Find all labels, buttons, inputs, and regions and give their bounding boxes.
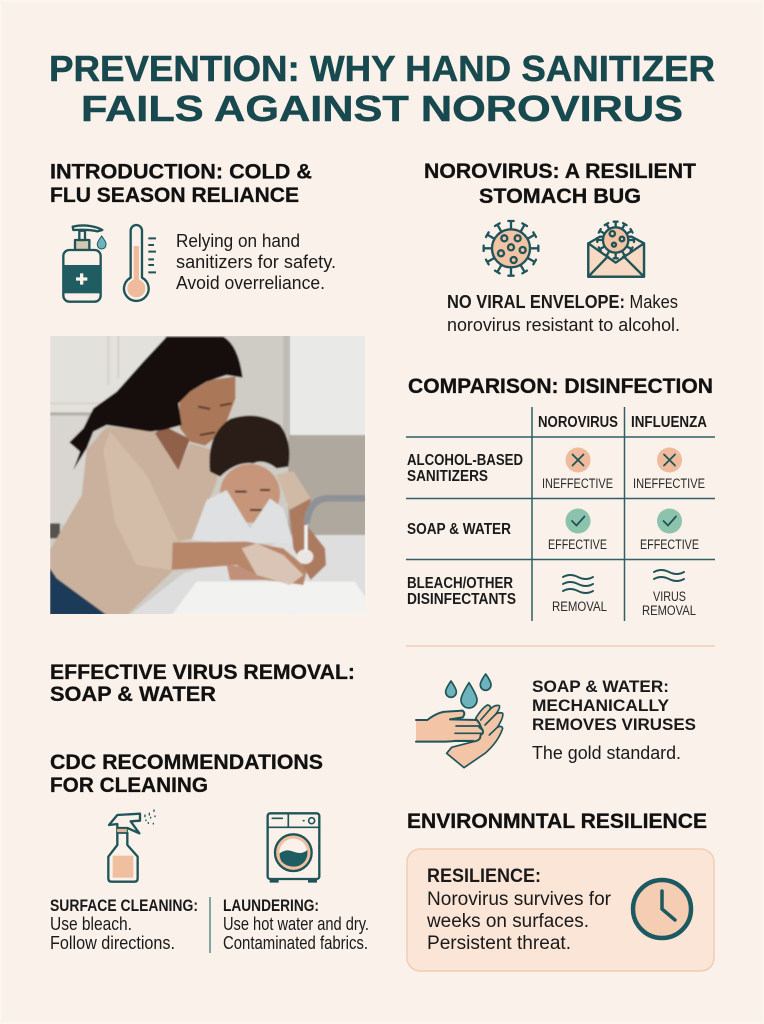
text: surface cleaning: SURFACE CLEANING: bbox=[50, 896, 198, 915]
text: surface cleaning: Follow directions. bbox=[50, 933, 175, 953]
panel: introduction bbox=[50, 160, 336, 302]
panel: norovirus bbox=[424, 159, 696, 335]
heading: environmental resilience: ENVIRONMNTAL RESILIENCE bbox=[407, 809, 707, 833]
icon: spray bottle bbox=[108, 810, 155, 882]
title: PREVENTION: WHY HAND SANITIZER bbox=[49, 48, 715, 89]
icon: virus in opened envelope bbox=[588, 222, 644, 277]
text: relying on sanitizers: Avoid overreliance. bbox=[176, 273, 325, 293]
row labels: SOAP & WATER bbox=[407, 521, 511, 538]
text: surface cleaning bbox=[50, 896, 198, 953]
text: laundering: Use hot water and dry. bbox=[223, 914, 369, 934]
icon: washing hands with water drops bbox=[416, 674, 503, 768]
text: mechanically removes viruses: MECHANICALLY bbox=[532, 696, 670, 715]
icon: virus bbox=[484, 221, 538, 276]
heading: norovirus bbox=[424, 159, 696, 208]
heading: CDC recommendations: FOR CLEANING bbox=[50, 773, 208, 797]
cell: soap norovirus effective: EFFECTIVE bbox=[548, 537, 607, 552]
icon: thermometer bbox=[124, 225, 156, 301]
heading: introduction: INTRODUCTION: COLD & bbox=[50, 160, 312, 184]
text: laundering: LAUNDERING: bbox=[223, 896, 319, 915]
text: resilience: weeks on surfaces. bbox=[426, 911, 589, 932]
cell: soap influenza effective: EFFECTIVE bbox=[640, 537, 699, 552]
cell: alcohol influenza ineffective: INEFFECTIVE bbox=[633, 476, 705, 491]
panel: soap and water bbox=[416, 674, 696, 768]
text: resilience bbox=[426, 866, 612, 954]
cell: soap norovirus effective bbox=[548, 508, 607, 552]
text: no viral envelope bbox=[447, 292, 680, 335]
cell: soap influenza effective bbox=[640, 508, 699, 552]
text: relying on sanitizers bbox=[176, 231, 336, 293]
row labels: SANITIZERS bbox=[407, 468, 488, 485]
title bbox=[49, 48, 715, 129]
icon: washing machine bbox=[268, 813, 319, 882]
photo: mother and child washing hands bbox=[50, 336, 365, 614]
text: relying on sanitizers: Relying on hand bbox=[176, 231, 300, 251]
cell: bleach norovirus removal bbox=[552, 575, 607, 614]
panel: comparison table bbox=[406, 374, 715, 621]
column headers bbox=[538, 414, 707, 431]
cell: bleach norovirus removal: REMOVAL bbox=[552, 599, 607, 614]
cell: bleach influenza virus removal: REMOVAL bbox=[642, 603, 696, 618]
text: mechanically removes viruses: The gold standard. bbox=[532, 743, 681, 763]
cell: bleach influenza virus removal: VIRUS bbox=[653, 589, 686, 604]
heading: norovirus: STOMACH BUG bbox=[479, 184, 641, 208]
text: no viral envelope: norovirus resistant to alcohol. bbox=[447, 315, 680, 335]
text: mechanically removes viruses: SOAP & WATER: bbox=[532, 677, 669, 696]
callout: resilience bbox=[407, 849, 714, 971]
column headers: NOROVIRUS bbox=[538, 414, 618, 431]
heading: effective virus removal bbox=[50, 660, 355, 706]
row labels: BLEACH/OTHER bbox=[407, 575, 513, 592]
title: FAILS AGAINST NOROVIRUS bbox=[81, 88, 683, 129]
text: resilience: RESILIENCE: bbox=[427, 866, 541, 887]
heading: norovirus: NOROVIRUS: A RESILIENT bbox=[424, 159, 696, 183]
row labels bbox=[407, 452, 523, 608]
row labels: ALCOHOL-BASED bbox=[407, 452, 523, 469]
heading: CDC recommendations: CDC RECOMMENDATIONS bbox=[50, 750, 323, 774]
heading: introduction: FLU SEASON RELIANCE bbox=[50, 183, 299, 207]
cell: alcohol norovirus ineffective: INEFFECTIVE bbox=[542, 476, 613, 491]
text: resilience: Norovirus survives for bbox=[427, 889, 612, 910]
panel: CDC recommendations bbox=[50, 750, 369, 953]
icon: clock bbox=[633, 880, 691, 938]
text: laundering: Contaminated fabrics. bbox=[223, 933, 368, 953]
row labels: DISINFECTANTS bbox=[407, 591, 516, 608]
heading: introduction bbox=[50, 160, 312, 207]
cell: bleach influenza virus removal bbox=[642, 570, 696, 618]
cell: alcohol norovirus ineffective bbox=[542, 448, 613, 491]
text: surface cleaning: Use bleach. bbox=[50, 914, 132, 934]
column headers: INFLUENZA bbox=[631, 414, 707, 431]
heading: effective virus removal: SOAP & WATER bbox=[50, 682, 216, 706]
heading: effective virus removal: EFFECTIVE VIRUS REMOVAL: bbox=[50, 660, 355, 684]
icon: sanitizer bottle bbox=[63, 225, 106, 302]
text: resilience: Persistent threat. bbox=[427, 933, 571, 954]
heading: comparison: COMPARISON: DISINFECTION bbox=[408, 374, 713, 398]
text: mechanically removes viruses bbox=[532, 677, 696, 763]
heading: CDC recommendations bbox=[50, 750, 323, 797]
text: no viral envelope: NO VIRAL ENVELOPE: Makes bbox=[447, 292, 678, 312]
text: relying on sanitizers: sanitizers for safety. bbox=[176, 252, 336, 272]
cell: alcohol influenza ineffective bbox=[633, 448, 705, 491]
text: mechanically removes viruses: REMOVES VIRUSES bbox=[532, 715, 696, 734]
text: laundering bbox=[223, 896, 369, 953]
